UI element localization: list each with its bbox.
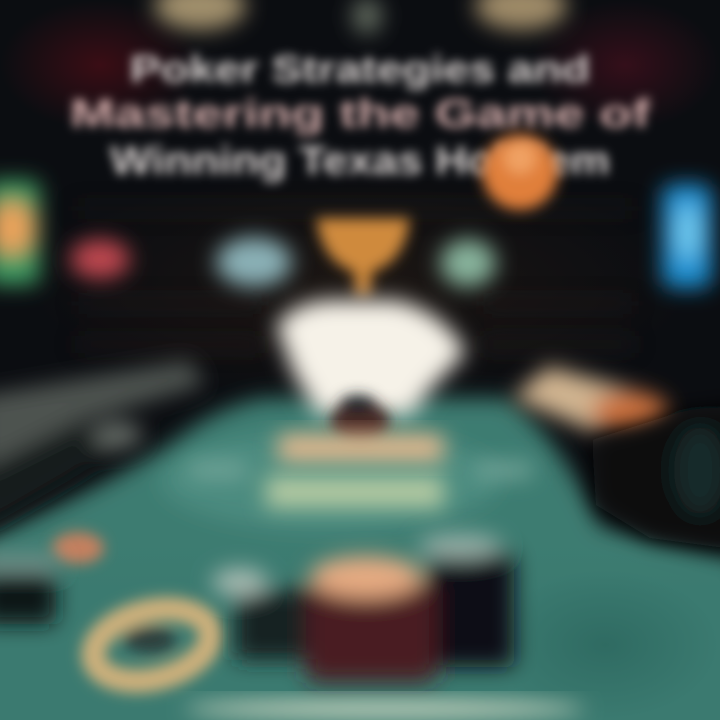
title: Winning Texas Hold'em [110,139,610,183]
icon: blue-grey chip [216,237,292,287]
title [70,49,651,183]
right black stack [592,405,720,550]
light text block on table [190,462,532,508]
icon: orange chip [482,134,558,210]
left dark chip stack [0,556,58,624]
icon: left green and orange tile [0,180,40,285]
icon: red chip [70,239,130,279]
shelves behind the dealer [75,205,635,349]
dealer dark centre [330,395,390,442]
top decorative ovals [154,0,567,34]
icon: right blue tile [662,184,712,288]
poker table [0,398,720,720]
centre chip stack [212,534,514,682]
dealer in white shirt [276,300,466,415]
right tan cards and orange chip [512,366,668,434]
small orange chip left [52,532,104,564]
title: Poker Strategies and [130,49,590,91]
icon: green chip [440,239,496,287]
title: Mastering the Game of [70,92,651,136]
tan card band on table [278,434,444,462]
icon: orange trophy [316,218,410,296]
light strip at bottom of table [185,700,585,718]
tan ring chip [86,597,218,693]
left grey rail [0,360,205,532]
